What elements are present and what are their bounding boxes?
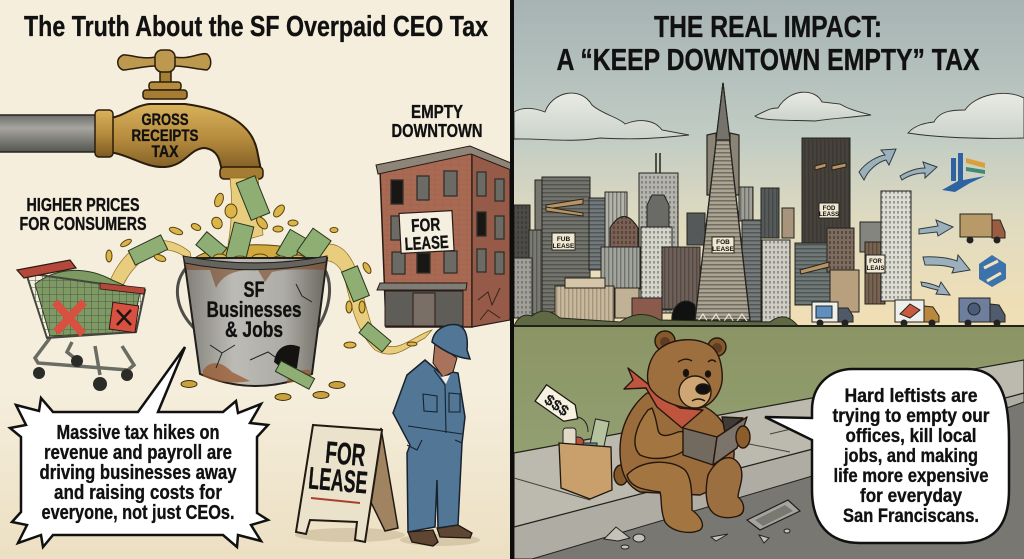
bear back and body — [620, 393, 734, 495]
white truck 1 — [812, 302, 853, 326]
bucket body — [184, 258, 327, 386]
sign lettering: LEASE — [307, 460, 369, 500]
burst text: Massive tax hikes on — [56, 422, 220, 444]
outlet ring — [220, 167, 263, 179]
clouds — [514, 92, 1024, 140]
cart rim — [100, 283, 145, 294]
speech burst: left — [10, 347, 268, 547]
street — [514, 360, 1024, 559]
icon: shopping cart — [17, 260, 145, 391]
pipe flange — [95, 110, 113, 157]
signs on buildings — [552, 203, 885, 273]
bucket label: & Jobs — [225, 317, 283, 342]
for lease sign tag 1: LEASE — [553, 243, 575, 250]
for lease sign tag 1 — [552, 233, 575, 250]
rubble — [604, 527, 790, 549]
sidewalk — [514, 360, 1024, 527]
for lease sign tag 4: LEAIS — [867, 266, 884, 272]
coins — [106, 192, 417, 348]
crack lines — [210, 284, 312, 368]
worker — [393, 325, 480, 546]
bucket label — [206, 277, 302, 342]
grass — [514, 326, 1024, 456]
for lease sign: LEASE — [404, 232, 449, 254]
sign lettering — [307, 433, 371, 500]
bubble text: jobs, and making — [843, 446, 978, 467]
rim — [183, 256, 327, 270]
for lease sign tag 3: FOD — [823, 206, 836, 212]
ground shadow — [400, 534, 480, 546]
faucet label: RECEIPTS — [132, 126, 198, 145]
faucet label: GROSS — [142, 110, 188, 129]
burst text: everyone, not just CEOs. — [42, 502, 234, 524]
burst text: driving businesses away — [40, 462, 237, 484]
storefront — [385, 291, 463, 326]
panel: left background — [0, 0, 511, 559]
eyes and nose — [684, 370, 688, 376]
bubble text: offices, kill local — [846, 426, 976, 447]
front board — [296, 425, 382, 542]
icon: blue hex logo — [979, 255, 1006, 287]
label: empty downtown: EMPTY — [411, 102, 463, 122]
red price box with X — [109, 302, 139, 333]
empty brick building — [376, 146, 511, 327]
label: empty downtown — [392, 102, 482, 141]
tan truck — [960, 214, 1005, 243]
right title — [556, 9, 980, 77]
bubble text: trying to empty our — [832, 406, 990, 427]
for lease sign tag 3 — [819, 203, 839, 218]
burst text: revenue and payroll are — [44, 442, 232, 464]
bubble text: for everyday — [860, 486, 962, 507]
boots — [408, 525, 472, 546]
faucet body — [110, 104, 261, 172]
bandana — [624, 368, 703, 428]
bills — [128, 176, 391, 352]
awning — [377, 283, 467, 290]
bushes — [514, 311, 798, 326]
blue truck — [959, 298, 1005, 326]
bear right leg — [706, 458, 744, 518]
head — [648, 340, 722, 408]
icon: blue gold logo — [942, 153, 985, 192]
bear — [614, 331, 750, 532]
for lease sign tag 1: FUB — [557, 236, 570, 243]
faucet handle — [118, 50, 211, 99]
for lease sign tag 4: FOR — [869, 259, 882, 265]
for lease sign tag 2: LEASE — [712, 246, 734, 253]
ears — [655, 331, 675, 351]
left title: The Truth About the SF Overpaid CEO Tax — [24, 11, 488, 43]
speech bubble: right — [765, 369, 1009, 543]
bear arm — [635, 408, 690, 458]
cart money — [35, 270, 140, 336]
bubble text — [832, 386, 990, 527]
face — [433, 343, 457, 377]
hole with spilled bill — [274, 345, 300, 369]
white undershirt — [441, 375, 450, 384]
muzzle — [679, 376, 711, 408]
building side — [472, 150, 510, 327]
bear left leg — [627, 462, 702, 532]
road — [514, 402, 1024, 559]
left overflow stream — [106, 240, 192, 292]
panel: faucet — [0, 50, 263, 179]
center divider — [510, 0, 514, 559]
icon: calculator — [747, 500, 800, 530]
groceries — [589, 419, 609, 453]
label: empty downtown: DOWNTOWN — [392, 121, 482, 141]
red underline — [311, 498, 360, 503]
paper bag — [559, 443, 612, 499]
cornice — [376, 146, 511, 174]
for lease sign — [399, 211, 454, 254]
for lease sign tag 2 — [712, 237, 734, 253]
departure arrows — [859, 149, 970, 295]
coins beside bucket — [181, 380, 345, 400]
transamerica pyramid — [695, 83, 750, 326]
rust — [184, 262, 326, 288]
bubble text: San Franciscans. — [843, 506, 979, 527]
faucet label: TAX — [152, 142, 179, 161]
curb face — [514, 393, 1024, 559]
for lease sign: FOR — [411, 214, 441, 236]
sign lettering: FOR — [324, 435, 367, 473]
frown and brows — [678, 359, 716, 401]
burst text — [40, 422, 237, 524]
right title: THE REAL IMPACT: — [654, 9, 882, 44]
building front — [380, 150, 472, 327]
price tag: $$$ — [541, 391, 572, 420]
burst text: and raising costs for — [54, 482, 222, 504]
white truck 2 — [895, 300, 939, 326]
bucket label: Businesses — [206, 297, 302, 322]
panel: right background — [514, 0, 1024, 330]
bubble text: Hard leftists are — [844, 386, 978, 407]
book — [722, 417, 743, 433]
central gold stream — [228, 178, 263, 245]
slab joints — [514, 424, 812, 500]
bucket — [177, 256, 345, 400]
bucket handle — [177, 268, 330, 330]
cart frame and wheels — [35, 338, 134, 375]
hard hat — [432, 325, 470, 359]
bear tail bump — [614, 465, 628, 485]
label: higher prices — [20, 195, 146, 234]
background towers — [514, 138, 911, 323]
pipe — [0, 115, 96, 152]
bubble text: life more expensive — [834, 466, 988, 487]
cart handle — [17, 260, 76, 278]
shadow — [295, 528, 405, 542]
faucet label — [132, 110, 198, 161]
tag string — [578, 417, 588, 432]
delivery trucks — [812, 214, 1005, 326]
coin pile — [190, 245, 322, 268]
label: higher prices: FOR CONSUMERS — [20, 214, 146, 234]
for lease sign tag 4 — [866, 255, 885, 273]
bear paw — [736, 426, 750, 448]
cart basket — [26, 273, 145, 338]
grocery bag with price tag — [535, 385, 612, 499]
label: higher prices: HIGHER PRICES — [26, 195, 140, 215]
money streams — [106, 176, 432, 354]
red X — [55, 302, 84, 334]
bucket label: SF — [244, 277, 264, 302]
horizon line — [514, 325, 1024, 327]
right overflow stream — [310, 244, 432, 354]
boarded planks — [546, 163, 846, 274]
back leg — [365, 428, 398, 531]
coveralls — [393, 360, 465, 532]
windows — [391, 171, 504, 274]
coverall details — [407, 370, 462, 450]
for lease sign tag 2: FOB — [716, 239, 730, 246]
city skyline — [514, 83, 911, 326]
for lease sign tag 3: LEASS — [819, 212, 839, 218]
crack — [478, 288, 500, 320]
a-frame for lease sign — [295, 425, 405, 542]
